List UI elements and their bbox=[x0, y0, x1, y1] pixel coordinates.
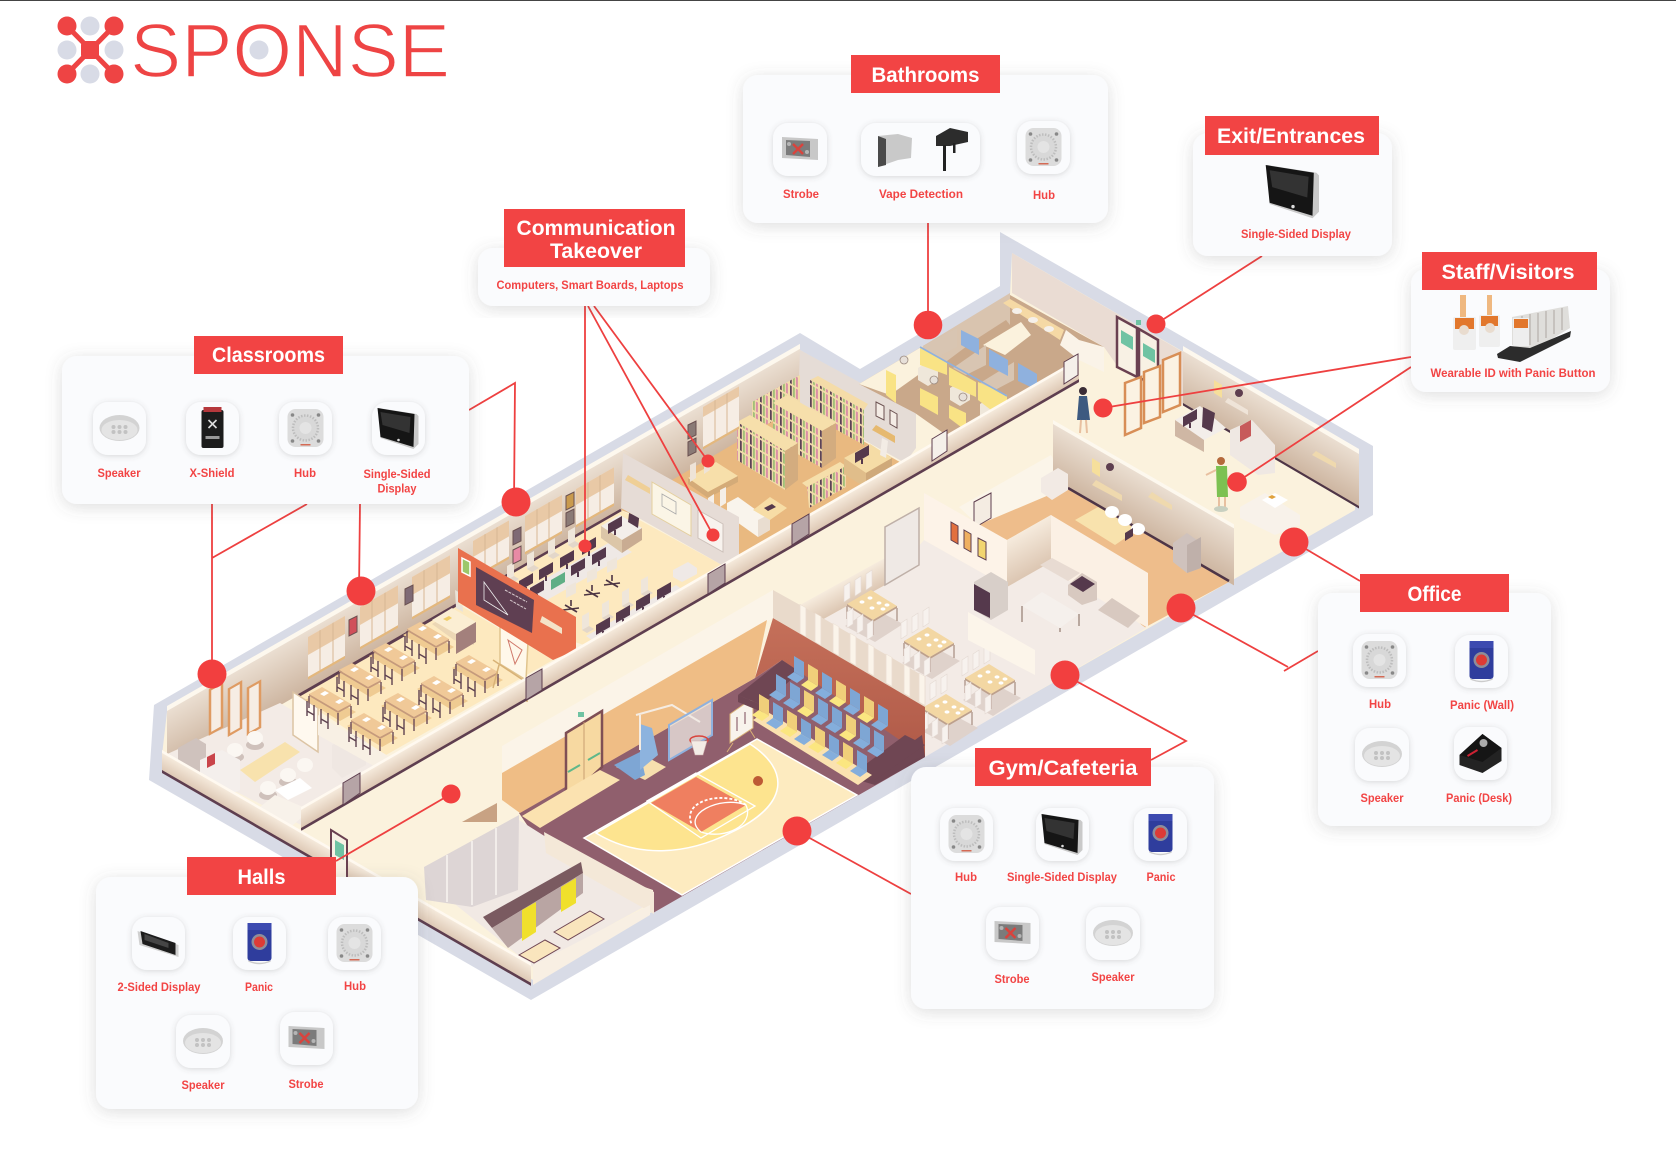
icon: vape sensor probe bbox=[936, 128, 968, 171]
room: locker room bbox=[424, 815, 654, 985]
lines: classrooms bbox=[212, 383, 515, 674]
logo wordmark: SPONSE bbox=[130, 9, 450, 94]
heading: exit entrances bbox=[1205, 116, 1379, 155]
label: x-shield: X-Shield bbox=[190, 466, 234, 480]
lab chairs bbox=[507, 527, 653, 633]
green monitor bbox=[551, 572, 565, 590]
heading: communication takeover bbox=[504, 209, 685, 267]
heading: halls: Halls bbox=[238, 866, 286, 889]
benches bbox=[519, 911, 604, 963]
label: hub: Hub bbox=[294, 466, 316, 480]
wall between lobby and office bbox=[1053, 420, 1234, 585]
right wall bbox=[544, 832, 654, 914]
locker floor bbox=[425, 820, 651, 967]
lounge sofa bbox=[1240, 493, 1300, 535]
printer on table bbox=[673, 562, 697, 582]
library wall frames bbox=[876, 402, 897, 428]
bookcase rear bbox=[773, 395, 836, 468]
reception desk bbox=[1175, 406, 1226, 452]
room: cafeteria and kitchen bbox=[800, 493, 1148, 757]
tile: hub bbox=[279, 402, 332, 455]
heading: office bbox=[1360, 574, 1509, 612]
lines: office bbox=[1181, 542, 1360, 671]
vanity with sinks bbox=[1003, 299, 1064, 340]
chalkboard bbox=[476, 567, 534, 633]
green poster bbox=[462, 558, 470, 576]
key outline bbox=[647, 773, 755, 838]
tile: hub bbox=[1017, 121, 1070, 174]
label: hub: Hub bbox=[955, 870, 977, 884]
white bathroom doors bbox=[932, 354, 1078, 461]
library side wall bbox=[798, 350, 916, 463]
lab swivel chairs bbox=[563, 557, 620, 612]
classroom floor bbox=[296, 604, 553, 755]
tile: hub bbox=[940, 808, 993, 861]
lines: halls bbox=[336, 794, 451, 861]
person: woman in green bbox=[1206, 457, 1228, 512]
north wing windows and pictures bbox=[308, 386, 739, 680]
heading: classrooms bbox=[194, 336, 343, 374]
sofa bbox=[250, 795, 310, 832]
top border bbox=[0, 0, 1676, 1]
kitchen right wall bbox=[1051, 515, 1148, 628]
cream strip before bleachers bbox=[753, 711, 872, 785]
toilet paper dispensers bbox=[900, 356, 967, 401]
reading table bbox=[688, 455, 738, 514]
heading: bathrooms bbox=[851, 55, 1000, 93]
file cabinet bbox=[178, 738, 206, 780]
panel: staff visitors bbox=[1411, 252, 1610, 392]
room: office bbox=[959, 420, 1234, 628]
label: hub: Hub bbox=[344, 979, 366, 993]
librarian desk bbox=[844, 438, 892, 488]
meeting table with chairs bbox=[226, 731, 313, 800]
building front wall bbox=[162, 750, 531, 986]
room: gym bbox=[502, 590, 925, 913]
classroom and lab windows bbox=[308, 386, 739, 680]
orange gym wall bbox=[502, 620, 767, 813]
teacher desk bbox=[432, 590, 476, 654]
book ledge bbox=[540, 616, 562, 634]
lockers bbox=[483, 862, 583, 948]
wall shelf bbox=[625, 475, 650, 494]
whiteboard partition bbox=[293, 692, 318, 752]
tile: x-shield bbox=[186, 402, 239, 455]
library shelf on wall bbox=[872, 425, 895, 443]
label: panic desk: Panic (Desk) bbox=[1446, 791, 1512, 805]
lines: gym bbox=[797, 675, 1186, 894]
cafeteria tables bbox=[844, 570, 1021, 746]
tile: strobe bbox=[773, 123, 827, 176]
label: wearable id: Wearable ID with Panic Button bbox=[1430, 366, 1596, 380]
base floor and hallway bbox=[162, 253, 1359, 980]
heading: staff visitors: Staff/Visitors bbox=[1442, 261, 1574, 284]
label: hub: Hub bbox=[1033, 188, 1055, 202]
white cabinet with binders bbox=[1230, 420, 1275, 475]
heading: communication takeover: Takeover bbox=[550, 240, 642, 263]
low partition wall bbox=[959, 455, 1068, 525]
label: speaker: Speaker bbox=[1360, 791, 1404, 805]
heading: communication takeover: Communication bbox=[516, 217, 676, 240]
heading: bathrooms: Bathrooms bbox=[872, 64, 980, 87]
lab baseboard bbox=[490, 510, 621, 585]
lab floor bbox=[458, 510, 722, 645]
tile: single-sided display bbox=[1036, 808, 1089, 861]
flip chart easel bbox=[493, 625, 532, 702]
kitchen stove bbox=[1068, 573, 1097, 605]
north wing back wall bbox=[167, 344, 800, 770]
building outline bbox=[149, 232, 1373, 1000]
heading: staff visitors bbox=[1422, 252, 1597, 290]
label: single-sided display: Single-Sided Display bbox=[1241, 227, 1351, 241]
whiteboard bbox=[652, 482, 691, 536]
coffee table bbox=[753, 497, 787, 520]
panel: exit entrances bbox=[1193, 116, 1392, 256]
library floor bbox=[621, 405, 905, 556]
lines: staff bbox=[1103, 357, 1411, 482]
blue trim on stalls bbox=[920, 347, 1007, 396]
hoop support stand bbox=[614, 705, 700, 780]
dish racks bbox=[974, 572, 1008, 620]
office table with chairs bbox=[1075, 506, 1145, 545]
icon: vape sensor vent bbox=[878, 134, 912, 167]
label: single-sided display: Single-Sided Display bbox=[1007, 870, 1117, 884]
back row bbox=[787, 656, 888, 731]
label: strobe: Strobe bbox=[288, 1077, 324, 1091]
label: panic wall: Panic (Wall) bbox=[1450, 698, 1514, 712]
rear wall bbox=[923, 293, 1010, 370]
cafeteria side wall and pilasters bbox=[773, 590, 925, 707]
label: speaker: Speaker bbox=[98, 466, 141, 480]
heading: gym cafeteria bbox=[975, 748, 1151, 786]
lines: exit bbox=[1156, 256, 1262, 324]
hoop net bbox=[690, 736, 708, 755]
hall floor shadow bbox=[462, 803, 497, 822]
glass partition doors bbox=[1125, 353, 1180, 435]
room: computer lab bbox=[458, 505, 722, 645]
tall rear wall above exit bbox=[1012, 253, 1183, 405]
room: library bbox=[621, 350, 916, 556]
lines: bathrooms bbox=[927, 223, 929, 325]
filing cabinet bbox=[1173, 533, 1201, 573]
cafeteria glass doors bbox=[885, 508, 919, 585]
office corner door bbox=[974, 493, 991, 528]
bookcase front bbox=[737, 415, 798, 490]
panel: halls bbox=[96, 857, 418, 1109]
heading: classrooms: Classrooms bbox=[212, 344, 325, 367]
yellow stall doors bbox=[886, 348, 1007, 427]
label: vape detection: Vape Detection bbox=[879, 187, 963, 201]
shower partitions bbox=[424, 815, 519, 907]
heading: gym cafeteria: Gym/Cafeteria bbox=[988, 757, 1138, 780]
tile: speaker bbox=[93, 402, 146, 455]
lobby back wall bbox=[1183, 346, 1359, 508]
tile: single-sided display bbox=[372, 402, 425, 455]
tile: strobe bbox=[986, 907, 1039, 960]
label: panic: Panic bbox=[245, 980, 273, 994]
logo O centre dot bbox=[250, 40, 268, 60]
label: panic: Panic bbox=[1146, 870, 1176, 884]
connector lines bbox=[212, 223, 1411, 894]
gym door bbox=[566, 711, 602, 800]
panel: classrooms bbox=[62, 336, 469, 504]
tile: 2-sided display bbox=[132, 917, 185, 970]
blue stall doors bbox=[961, 330, 1037, 390]
label: devices: Computers, Smart Boards, Laptops bbox=[496, 278, 684, 292]
tall windows bbox=[210, 661, 260, 756]
light floor by entrance bbox=[1060, 330, 1104, 372]
tile: panic desk bbox=[1454, 727, 1507, 780]
tile: hub bbox=[1353, 634, 1406, 687]
label: strobe: Strobe bbox=[994, 972, 1030, 986]
red wall behind stands bbox=[755, 618, 925, 757]
cream washroom patch bbox=[983, 322, 1031, 355]
kitchen shelf bbox=[1040, 558, 1080, 581]
tile: strobe bbox=[280, 1012, 333, 1065]
tactics board bbox=[727, 698, 755, 752]
label: hub: Hub bbox=[1369, 697, 1391, 711]
free throw arc bbox=[695, 802, 748, 834]
panel: office bbox=[1318, 574, 1551, 826]
teacher computer desk bbox=[601, 505, 642, 553]
red classroom wall with chalkboard bbox=[458, 548, 576, 660]
person: woman with tablet bbox=[1077, 387, 1090, 433]
north wing front wall bbox=[301, 354, 1079, 831]
bathroom floor bbox=[859, 295, 1104, 437]
gym wall cream band bbox=[502, 590, 773, 773]
front row bbox=[752, 694, 867, 777]
logo bbox=[58, 9, 450, 94]
tile: speaker bbox=[176, 1015, 230, 1068]
key bbox=[651, 777, 746, 832]
tile: vape detection bbox=[861, 123, 980, 176]
heading: halls bbox=[187, 857, 336, 895]
office floor bbox=[978, 487, 1229, 628]
grey wall with lab whiteboard bbox=[621, 453, 739, 565]
locker room front wall bbox=[533, 905, 650, 985]
cafeteria rear wall bbox=[800, 558, 885, 632]
location dots bbox=[198, 311, 1308, 846]
dashed arc bbox=[690, 798, 746, 825]
icon: wearable badges and rack bbox=[1453, 295, 1571, 362]
student desks bbox=[305, 622, 503, 755]
cabinet with binders bbox=[200, 750, 240, 800]
label: single-sided display: Single-Sided bbox=[364, 467, 430, 481]
wall shelves and clock bbox=[1214, 380, 1336, 468]
exit doors bbox=[1117, 317, 1158, 385]
toilet stalls bbox=[918, 362, 1000, 422]
panel: communication takeover bbox=[478, 209, 710, 306]
kitchen inner wall bbox=[1007, 515, 1051, 587]
label: speaker: Speaker bbox=[1092, 970, 1135, 984]
kitchen sinks bbox=[1098, 598, 1140, 628]
classroom baseboard bbox=[296, 604, 458, 697]
bleacher stairs right bbox=[858, 735, 925, 785]
isometric school floor plan bbox=[149, 232, 1373, 1000]
low divider wall bbox=[318, 715, 390, 775]
hall exit door bbox=[331, 830, 347, 890]
room: lobby bbox=[1077, 317, 1359, 535]
lab monitors bbox=[519, 537, 671, 636]
kitchen low counter bbox=[968, 612, 1035, 675]
stall partitions bbox=[922, 328, 1014, 390]
tile: hub bbox=[328, 917, 381, 970]
three point zone bbox=[596, 744, 778, 851]
shelf along side wall bbox=[810, 376, 868, 445]
lab long tables bbox=[522, 541, 686, 643]
grey classroom doors bbox=[343, 514, 809, 805]
bleacher seats bbox=[752, 656, 888, 777]
tile: panic bbox=[1134, 808, 1187, 861]
tile: speaker bbox=[1086, 907, 1140, 960]
wall shelf and clock bbox=[1092, 458, 1172, 510]
basketball court bbox=[584, 739, 857, 895]
cream entry floor bbox=[859, 346, 942, 395]
tile: panic wall bbox=[1455, 635, 1508, 688]
label: 2-sided display: 2-Sided Display bbox=[118, 980, 201, 994]
room: staff meeting room bbox=[165, 661, 390, 832]
middle row bbox=[769, 674, 884, 757]
logo mark: X node icon bbox=[58, 16, 124, 84]
white sofa bbox=[727, 497, 770, 537]
wall with paintings bbox=[924, 493, 1007, 587]
projected screen bbox=[698, 510, 723, 552]
label: strobe: Strobe bbox=[783, 187, 819, 201]
wood strip by door bbox=[522, 770, 620, 828]
lines: communication bbox=[585, 306, 713, 546]
kitchen prep table bbox=[1022, 592, 1079, 632]
icon: single-sided display bbox=[1266, 165, 1319, 218]
heading: office: Office bbox=[1408, 583, 1462, 606]
tile: panic bbox=[233, 917, 286, 970]
panel: bathrooms bbox=[743, 55, 1108, 223]
heading: exit entrances: Exit/Entrances bbox=[1217, 125, 1365, 148]
tile: speaker bbox=[1355, 728, 1409, 781]
cafeteria floor bbox=[800, 540, 1146, 757]
panel: gym cafeteria bbox=[911, 748, 1214, 1009]
printer bbox=[332, 735, 366, 778]
office printer bbox=[1041, 468, 1068, 500]
backboard bbox=[669, 700, 712, 760]
bleacher stairs left bbox=[738, 660, 800, 712]
room: classroom bbox=[293, 590, 553, 775]
basketball bbox=[753, 776, 763, 786]
gym floor bbox=[519, 660, 925, 913]
label: speaker: Speaker bbox=[182, 1078, 225, 1092]
low bookcase bbox=[802, 462, 846, 508]
wall pictures bbox=[349, 421, 696, 636]
label: single-sided display: Display bbox=[378, 482, 417, 496]
shelf against back wall bbox=[752, 375, 800, 432]
room: bathrooms bbox=[859, 293, 1104, 437]
